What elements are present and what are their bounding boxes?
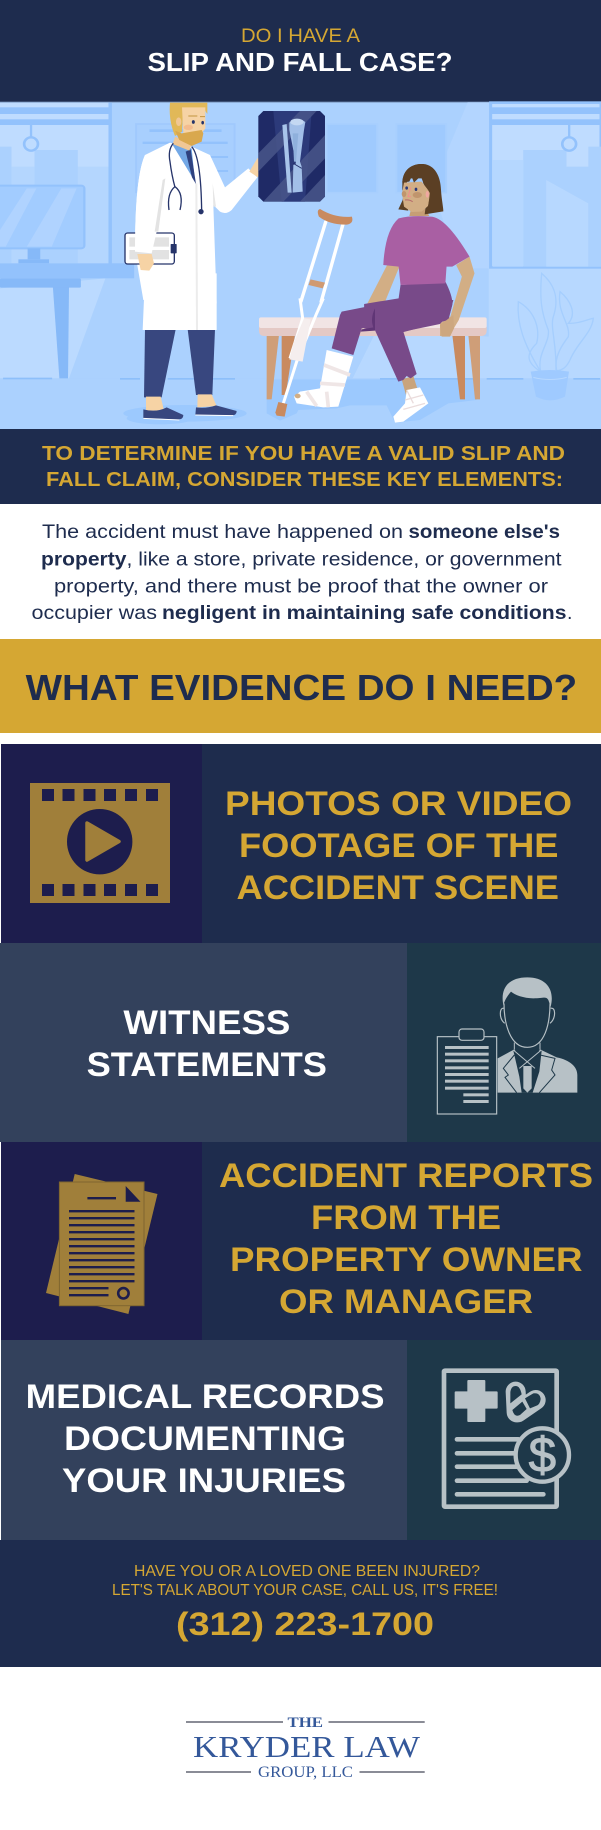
phone number: (312) 223-1700: [176, 1606, 434, 1642]
text block: negligence paragraph: .: [567, 602, 572, 624]
crutch: [275, 209, 352, 417]
panel: accident reports: ACCIDENT REPORTS: [219, 1157, 593, 1195]
panel: photos or video: FOOTAGE OF THE: [239, 827, 558, 865]
logo: The Kryder Law Group: THE: [288, 1715, 323, 1731]
panel: medical records: [1, 1340, 601, 1540]
text block: negligence paragraph: occupier was: [32, 602, 157, 624]
panel: accident reports: [1, 1142, 601, 1340]
panel: accident reports: FROM THE: [311, 1199, 501, 1237]
panel: photos or video: ACCIDENT SCENE: [236, 869, 559, 907]
panel: key elements heading: TO DETERMINE IF YOU HAVE A VALID SLIP AND: [42, 442, 565, 465]
panel: header: [0, 0, 601, 102]
logo: The Kryder Law Group: KRYDER LAW: [193, 1729, 421, 1764]
panel: call to action: HAVE YOU OR A LOVED ONE BEEN INJURED?: [134, 1563, 480, 1580]
text block: negligence paragraph: property: [41, 548, 127, 570]
doctor: [125, 103, 262, 420]
icon: witness with statement: [437, 977, 577, 1114]
text block: negligence paragraph: [32, 521, 572, 624]
text block: negligence paragraph: The accident must have happened on: [42, 521, 403, 543]
panel: photos or video: [1, 744, 601, 943]
text block: negligence paragraph: , like a store, private residence, or government: [126, 548, 562, 570]
panel: accident reports: OR MANAGER: [279, 1283, 533, 1321]
logo: The Kryder Law Group: GROUP, LLC: [258, 1764, 353, 1781]
bench: [259, 317, 487, 399]
title: SLIP AND FALL CASE?: [148, 49, 452, 77]
panel: medical records: MEDICAL RECORDS: [26, 1378, 384, 1416]
panel: call to action: LET'S TALK ABOUT YOUR CASE, CALL US, IT'S FREE!: [112, 1582, 498, 1599]
panel: witness statements: [0, 943, 601, 1142]
banner: what evidence: [0, 639, 601, 733]
subtitle: DO I HAVE A: [241, 26, 360, 47]
text block: negligence paragraph: property, and there must be proof that the owner or: [54, 576, 549, 598]
panel: accident reports: PROPERTY OWNER: [230, 1241, 583, 1279]
floor shadows and baseboards: [267, 379, 477, 423]
panel: key elements heading: [0, 429, 601, 504]
patient: [294, 164, 475, 423]
icon: medical bill: $: [529, 1428, 556, 1483]
panel: photos or video: PHOTOS OR VIDEO: [225, 785, 572, 823]
text block: negligence paragraph: someone else's: [408, 521, 560, 543]
panel: call to action: [0, 1540, 601, 1667]
icon: medical bill: [444, 1371, 569, 1507]
plant: [518, 273, 593, 372]
banner: what evidence: WHAT EVIDENCE DO I NEED?: [26, 667, 577, 708]
text block: negligence paragraph: negligent in maintaining safe conditions: [162, 602, 567, 624]
logo: The Kryder Law Group: [186, 1715, 425, 1781]
panel: witness statements: STATEMENTS: [87, 1046, 327, 1084]
icon: stacked documents: [46, 1174, 158, 1314]
icon: film strip: [30, 783, 170, 903]
panel: witness statements: WITNESS: [123, 1004, 290, 1042]
x-ray: [258, 111, 325, 202]
panel: key elements heading: FALL CLAIM, CONSIDER THESE KEY ELEMENTS:: [46, 468, 563, 491]
panel: medical records: YOUR INJURIES: [62, 1462, 346, 1500]
panel: medical records: DOCUMENTING: [64, 1420, 346, 1458]
illustration: doctor showing x-ray to injured patient: [0, 102, 601, 429]
